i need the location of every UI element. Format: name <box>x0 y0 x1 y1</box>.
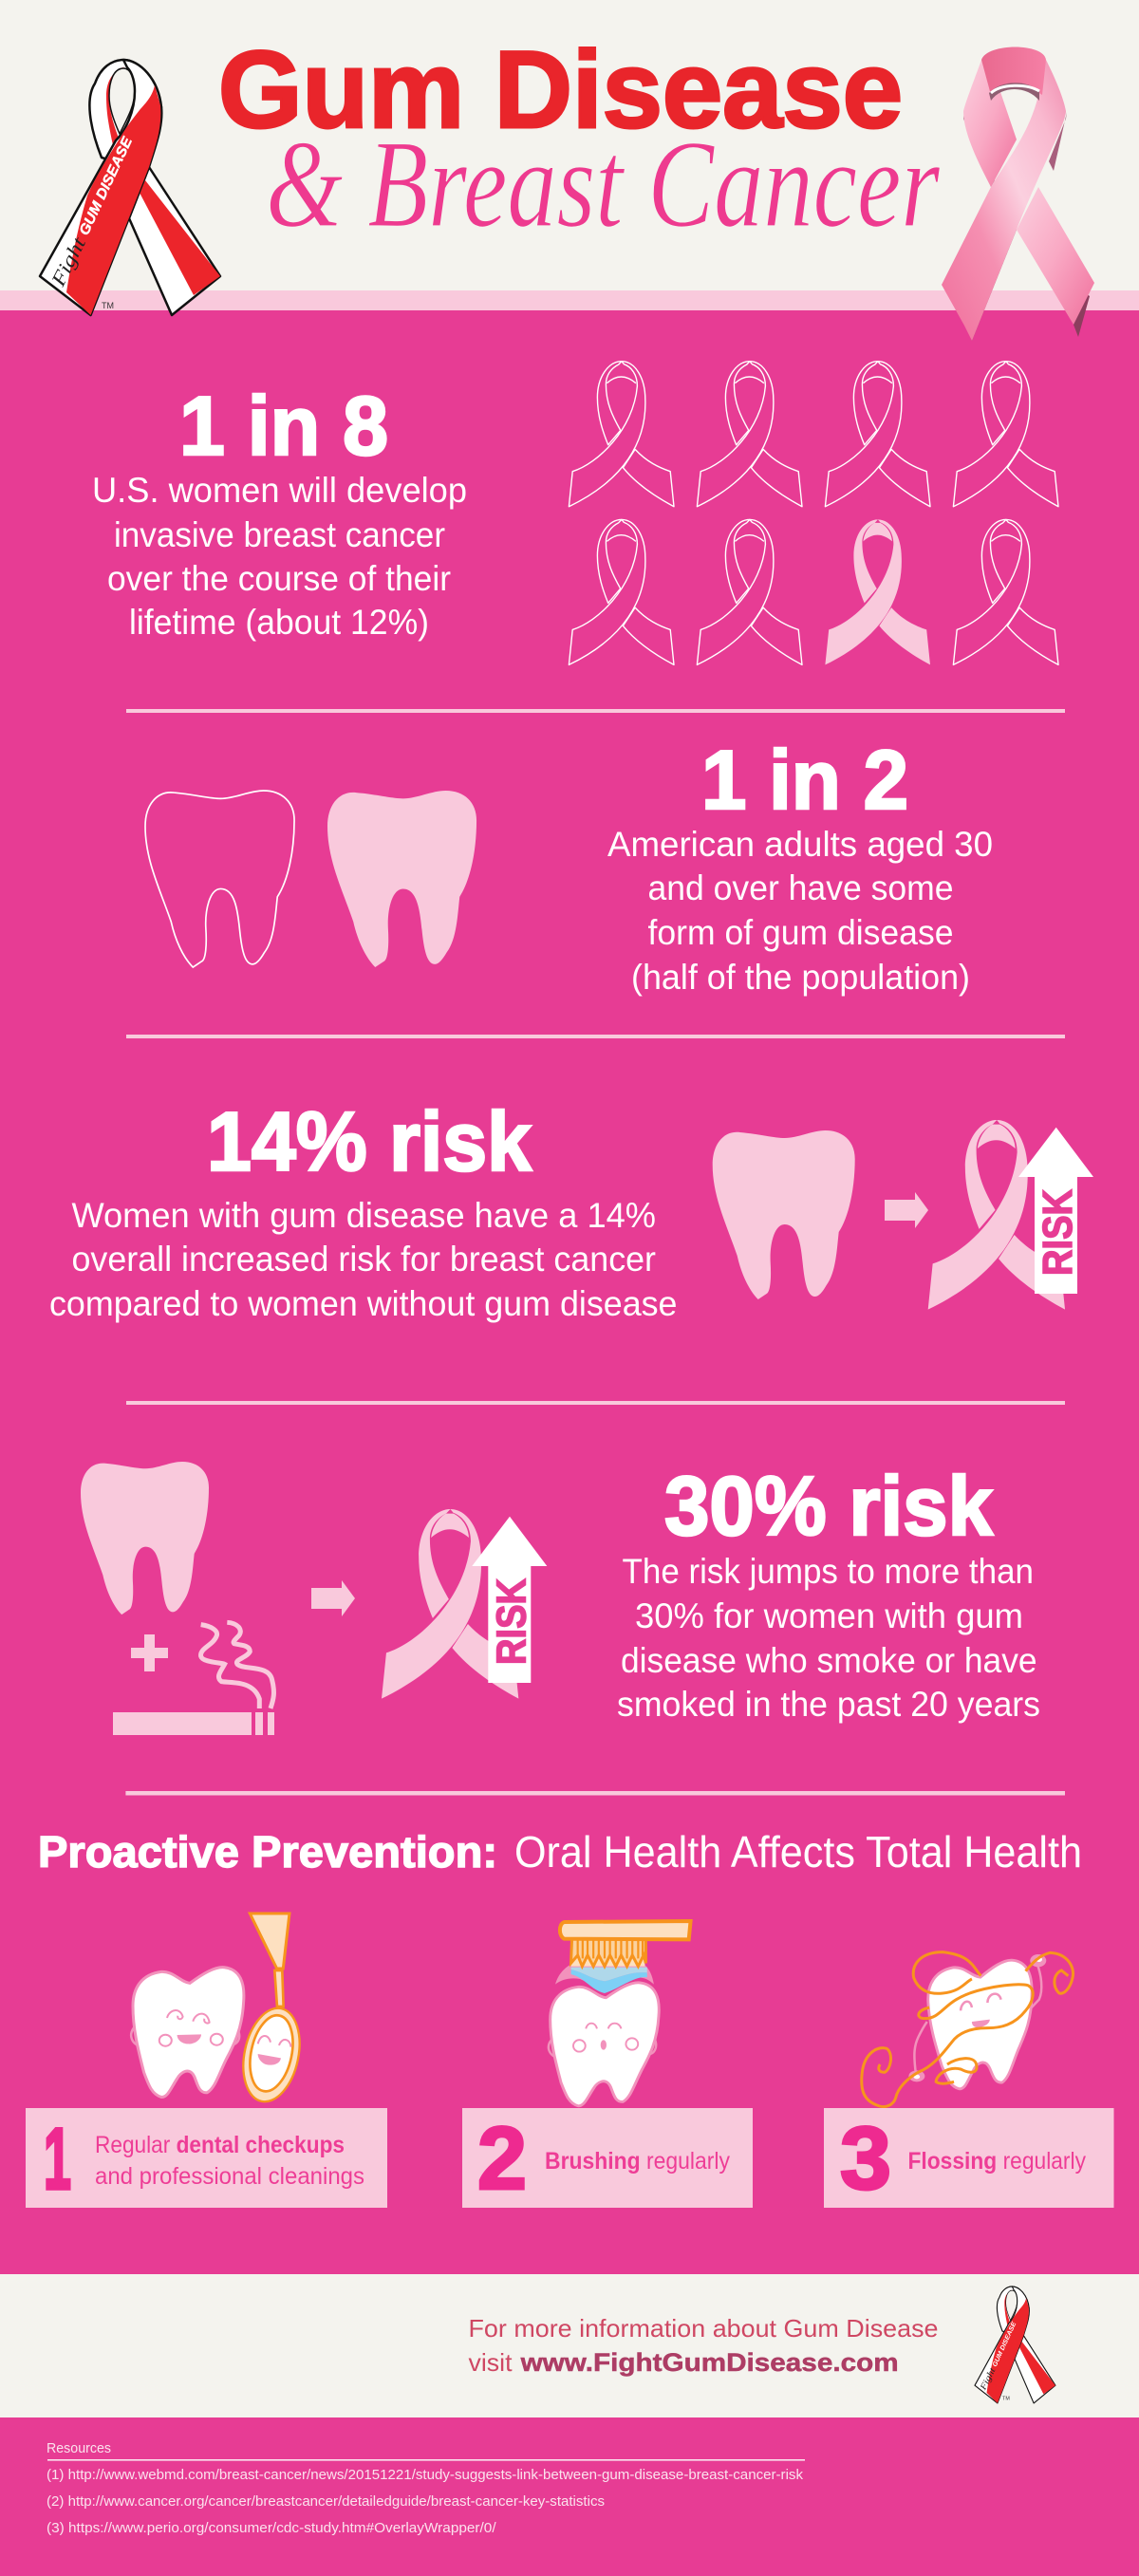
text block: more information <box>469 2314 938 2377</box>
icon: pink awareness ribbon <box>942 47 1094 341</box>
heading: proactive prevention: Oral Health Affects Total Health <box>514 1827 1082 1876</box>
text block: 1 in 2 description: form of gum disease <box>647 913 953 952</box>
heading: 30% risk: 30% risk <box>664 1459 994 1553</box>
text block: 1 in 8 description: U.S. women will develop <box>92 471 467 510</box>
title: & Breast Cancer <box>266 114 940 253</box>
title: Gum Disease <box>218 29 903 151</box>
panel: footer call to action <box>0 2274 1139 2417</box>
label box: step 3: 3 <box>840 2108 891 2208</box>
panel: step 3 flossing <box>824 1952 1114 2208</box>
label box: step 1 <box>26 2108 387 2208</box>
heading: proactive prevention <box>38 1827 1082 1876</box>
panel: step 2 brushing <box>462 1921 753 2208</box>
text block: resources: (3) https://www.perio.org/consumer/cdc-study.htm#OverlayWrapper/0/ <box>47 2520 496 2536</box>
icon: happy tooth <box>131 1968 244 2097</box>
panel: 14% risk <box>49 1094 1093 1323</box>
arrow <box>885 1192 928 1228</box>
panel: step 1 dental checkups <box>26 1913 387 2208</box>
text block: 14% description <box>49 1196 678 1323</box>
text block: 30% description: smoked in the past 20 years <box>617 1685 1040 1724</box>
icon: Fight Gum Disease ribbon logo small: Fight <box>979 2366 999 2393</box>
text block: 14% description: overall increased risk for breast cancer <box>72 1240 656 1279</box>
icon: ribbon with risk arrow <box>382 1509 547 1699</box>
heading: 1 in 8: 1 in 8 <box>179 379 388 473</box>
icon: Fight Gum Disease ribbon logo: Fight <box>47 233 91 290</box>
icon grid: eight ribbons, one filled <box>569 362 1058 664</box>
label box: step 1: and professional cleanings <box>95 2163 364 2190</box>
label box: step 2: 2 <box>477 2108 527 2208</box>
icon: dental mirror <box>235 1913 308 2107</box>
heading: 14% risk: 14% risk <box>207 1094 532 1188</box>
icon: Fight Gum Disease ribbon logo small: TM <box>1002 2397 1010 2402</box>
panel: 1 in 2 <box>145 733 993 997</box>
icon: tooth <box>713 1130 855 1299</box>
text block: 1 in 8 description: lifetime (about 12%) <box>129 603 429 642</box>
arrow <box>311 1580 355 1616</box>
icon: tooth with floss <box>862 1952 1074 2107</box>
label box: step 2 <box>462 2108 753 2208</box>
icon: cigarette with smoke <box>113 1622 274 1735</box>
text block: 1 in 8 description <box>92 471 467 642</box>
icon: Fight Gum Disease ribbon logo small: GUM DISEASE <box>992 2321 1018 2368</box>
text block: more information: For more information about Gum Disease <box>469 2314 938 2343</box>
text block: more information: www.FightGumDisease.com <box>520 2348 899 2377</box>
title <box>218 29 940 253</box>
text block: 30% description: The risk jumps to more than <box>623 1552 1034 1591</box>
text block: 1 in 8 description: invasive breast cancer <box>114 515 445 554</box>
text block: 1 in 8 description: over the course of their <box>107 559 451 598</box>
icon: tooth <box>81 1462 209 1615</box>
text block: 30% description: disease who smoke or have <box>621 1641 1037 1680</box>
text block: 30% description <box>617 1552 1040 1724</box>
icon: Fight Gum Disease ribbon logo: GUM DISEASE <box>76 134 136 238</box>
label box: step 2: Brushing regularly <box>545 2148 730 2175</box>
label box: step 3: Flossing regularly <box>907 2148 1086 2175</box>
text block: more information: visit <box>469 2348 513 2377</box>
text block: 1 in 2 description: and over have some <box>647 868 953 907</box>
text block: 14% description: Women with gum disease have a 14% <box>72 1196 656 1235</box>
icon: ribbon with risk arrow: RISK <box>1035 1189 1081 1276</box>
label box: step 1: Regular dental checkups <box>95 2132 345 2158</box>
label box: step 1: 1 <box>44 2111 71 2208</box>
heading: proactive prevention: Proactive Prevention: <box>38 1827 497 1876</box>
panel: 1 in 8 <box>92 362 1058 664</box>
icon: outline and filled teeth <box>145 791 476 967</box>
icon: tooth with toothbrush <box>549 1921 691 2106</box>
header band <box>0 0 1139 310</box>
heading: 1 in 2: 1 in 2 <box>701 733 908 827</box>
text block: 30% description: 30% for women with gum <box>635 1596 1023 1635</box>
icon: ribbon with risk arrow: RISK <box>488 1578 534 1665</box>
text block: 1 in 2 description: American adults aged 30 <box>607 825 993 864</box>
panel: 30% risk <box>81 1459 1040 1735</box>
text block: 14% description: compared to women without gum disease <box>49 1284 678 1323</box>
icon: Fight Gum Disease ribbon logo: TM <box>102 301 114 310</box>
icon: Fight Gum Disease ribbon logo small <box>975 2287 1055 2403</box>
text block: resources: Resources <box>47 2440 111 2456</box>
text block: resources: (1) http://www.webmd.com/breast-cancer/news/20151221/study-suggests-link-between-gum-disease-breast-cancer-risk <box>47 2467 803 2483</box>
icon: plus sign <box>131 1634 168 1671</box>
label box: step 3 <box>824 2108 1114 2208</box>
text block: resources <box>47 2440 805 2536</box>
icon: ribbon with risk arrow <box>928 1120 1093 1310</box>
icon: Fight Gum Disease ribbon logo <box>40 60 220 315</box>
text block: 1 in 2 description <box>607 825 993 997</box>
text block: resources: (2) http://www.cancer.org/cancer/breastcancer/detailedguide/breast-cancer-key-statistics <box>47 2493 605 2510</box>
text block: 1 in 2 description: (half of the population) <box>631 958 970 997</box>
